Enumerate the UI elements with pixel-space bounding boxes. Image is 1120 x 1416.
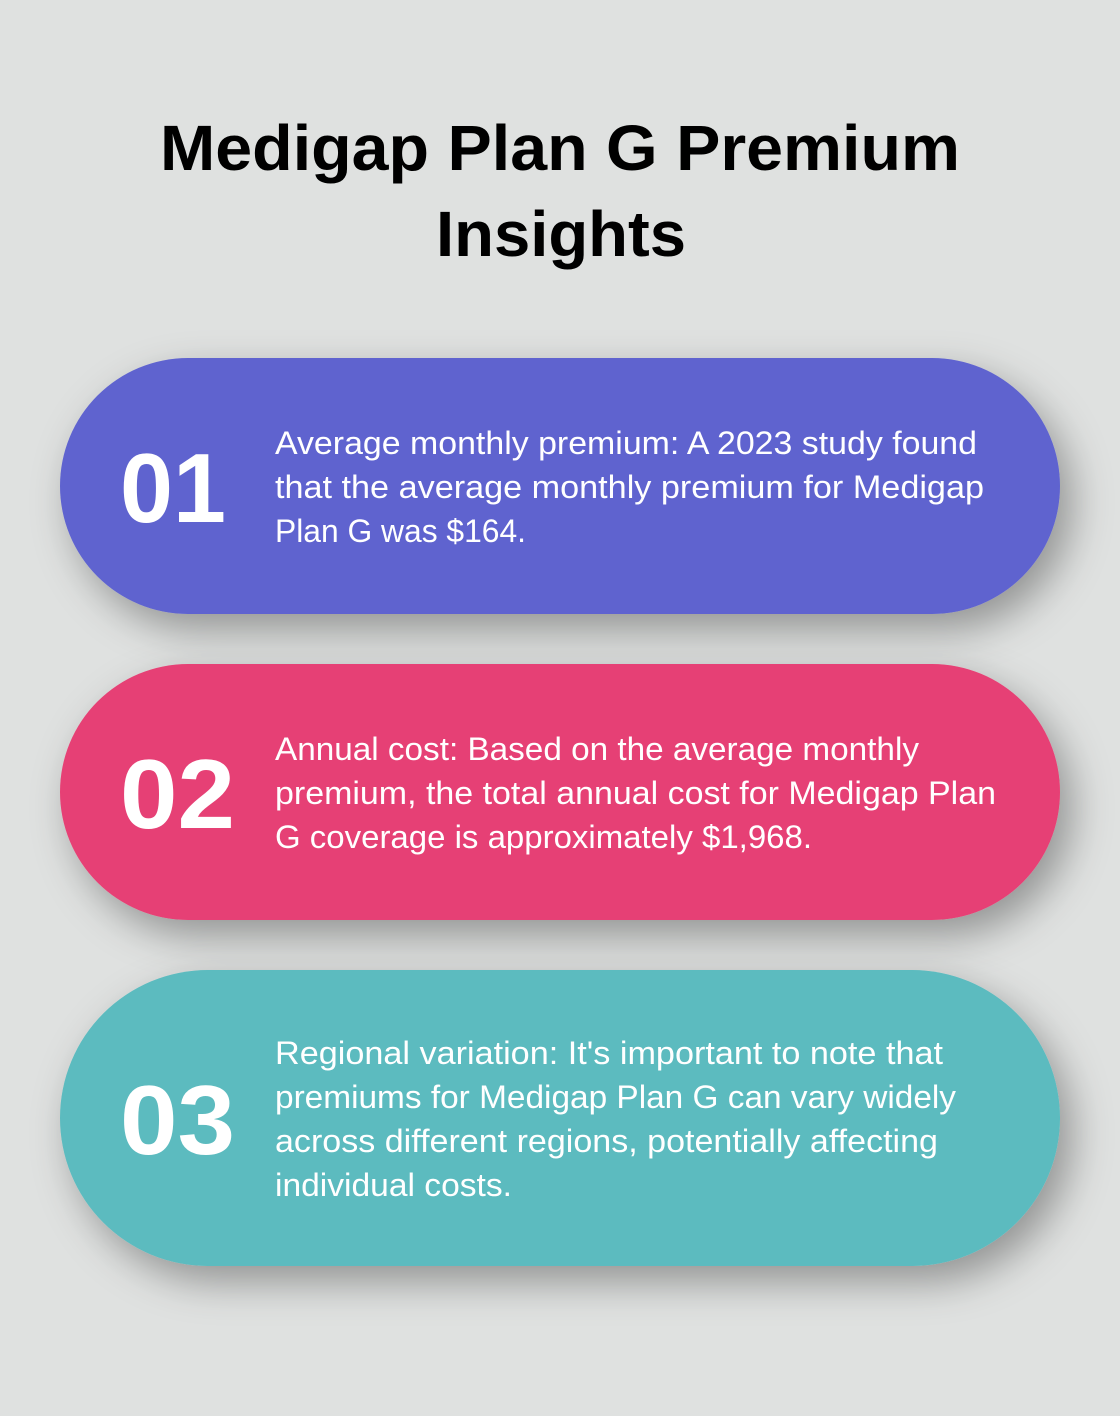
text block 1	[275, 425, 984, 549]
title: Insights	[436, 198, 686, 270]
title	[160, 112, 960, 270]
panel: annual cost	[60, 664, 1060, 920]
text block 2: Annual cost: Based on the average monthly	[275, 731, 920, 767]
text block 3: individual costs.	[275, 1167, 512, 1203]
title: Medigap Plan G Premium	[160, 112, 960, 184]
text block 1: that the average monthly premium for Medigap	[275, 469, 984, 505]
pill background: teal	[60, 970, 1060, 1266]
number 01: 01	[120, 433, 226, 543]
number 03: 03	[120, 1065, 235, 1175]
pill background: blue	[60, 358, 1060, 614]
text block 3: premiums for Medigap Plan G can vary widely	[275, 1079, 957, 1115]
number 02: 02	[120, 739, 235, 849]
text block 3	[275, 1035, 957, 1203]
text block 3: Regional variation: It's important to note that	[275, 1035, 943, 1071]
text block 2: G coverage is approximately $1,968.	[275, 819, 812, 855]
text block 1: Average monthly premium: A 2023 study found	[275, 425, 977, 461]
text block 1: Plan G was $164.	[275, 513, 526, 549]
text block 3: across different regions, potentially affecting	[275, 1123, 938, 1159]
panel: regional variation	[60, 970, 1060, 1266]
panel: average monthly premium	[60, 358, 1060, 614]
pill background: pink	[60, 664, 1060, 920]
text block 2	[275, 731, 996, 855]
text block 2: premium, the total annual cost for Medigap Plan	[275, 775, 996, 811]
